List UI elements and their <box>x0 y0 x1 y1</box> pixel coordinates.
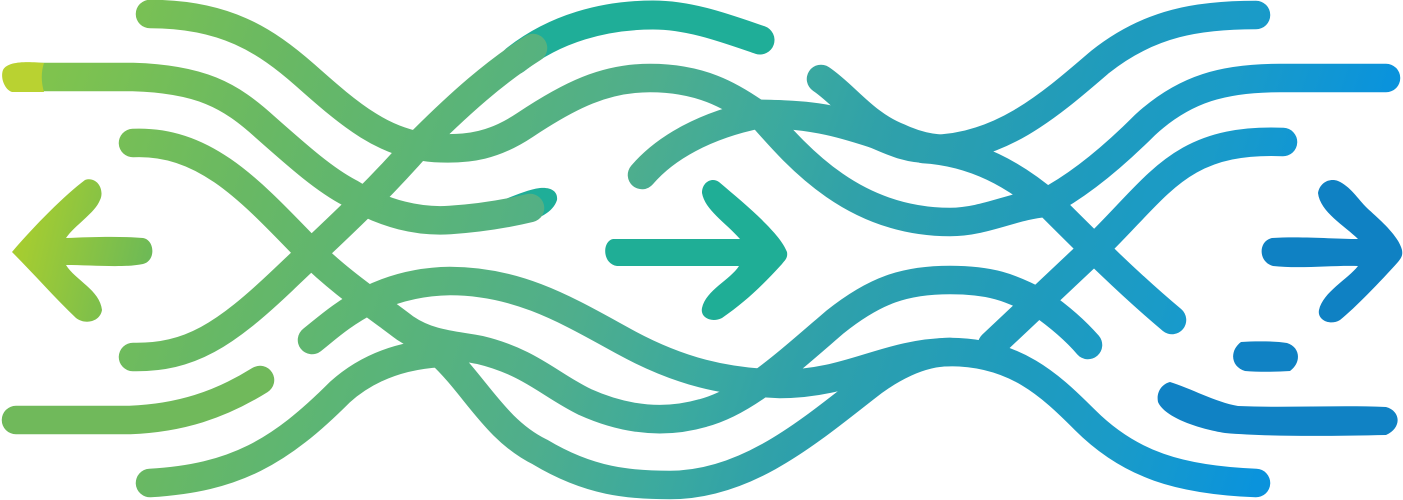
strand: teal tip behind second strand <box>497 188 557 225</box>
strand: second left long band <box>30 77 530 220</box>
strand: centre wave to bottom right tip <box>312 281 1256 483</box>
arrow: far right pointing <box>1262 180 1402 322</box>
strand: bottom right short <box>1158 382 1398 436</box>
strand: right middle to lower crossing <box>992 142 1283 345</box>
strand: top left to top right <box>150 14 1256 149</box>
arrow: left pointing <box>12 179 152 322</box>
strand: bottom left through lower arch <box>150 352 950 485</box>
strand: centre left tip through to right tip <box>642 114 1172 320</box>
arrow: centre right pointing <box>605 180 787 320</box>
strand: left lower arc up to top centre <box>133 48 533 357</box>
dash: right <box>1233 341 1298 372</box>
lime start cap of second strand <box>2 62 44 92</box>
strand: top right branch <box>821 79 950 149</box>
strand: teal top arc <box>515 15 760 60</box>
strand: left third band through centre bottom to right <box>133 143 1088 419</box>
strand: centre down to top right long <box>760 78 1386 222</box>
strand: bottom left short <box>16 380 260 420</box>
